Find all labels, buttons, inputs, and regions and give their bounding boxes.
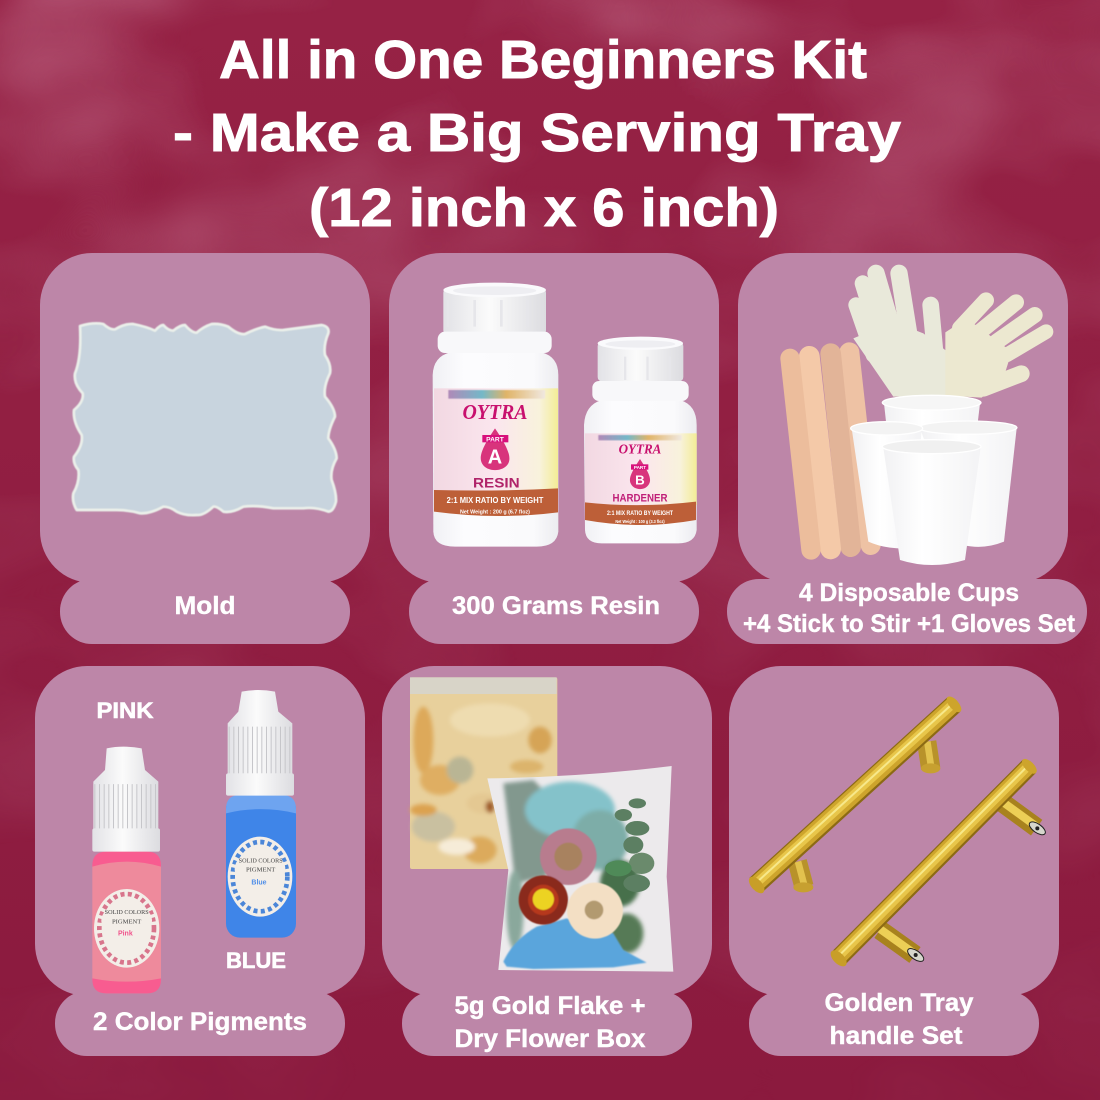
icon: blue pigment bottle: PIGMENT — [246, 867, 275, 874]
icon: blue pigment bottle: SOLID COLORS — [239, 857, 283, 864]
label: pink: PINK — [96, 698, 154, 723]
panel: resin — [389, 253, 719, 644]
icon: pink pigment bottle — [92, 747, 161, 993]
panel: gold flake and flowers — [382, 666, 712, 1056]
caption: gold flake and flowers — [454, 992, 646, 1053]
icon: gold flake bag — [410, 677, 557, 869]
icon: resin bottle: A — [488, 446, 502, 468]
icon: hardener bottle: B — [635, 472, 645, 487]
icon: pink pigment bottle: Pink — [118, 931, 133, 938]
icon: resin bottle: 2:1 MIX RATIO BY WEIGHT — [447, 496, 543, 505]
caption: gold flake and flowers: Dry Flower Box — [454, 1025, 646, 1053]
icon: pink pigment bottle: PIGMENT — [112, 918, 141, 925]
panel: mold — [40, 253, 370, 644]
icon: hardener bottle: Net Weight : 100 g (3.3 floz) — [615, 519, 665, 524]
icon: resin bottle: Net Weight : 200 g (6.7 floz) — [460, 510, 530, 516]
icon: gloves — [853, 273, 1046, 398]
icon: resin bottle: RESIN — [473, 475, 520, 491]
caption: cups sticks gloves — [743, 579, 1076, 638]
caption: handles: Golden Tray — [824, 989, 974, 1017]
label: blue: BLUE — [226, 948, 286, 973]
icon: hardener bottle: OYTRA — [619, 442, 661, 457]
title: (12 inch x 6 inch) — [309, 178, 779, 238]
background — [0, 0, 1100, 828]
icon: blue pigment bottle — [226, 690, 296, 938]
title: All in One Beginners Kit — [219, 30, 867, 90]
icon: golden handle one — [746, 694, 964, 896]
caption: resin: 300 Grams Resin — [452, 592, 660, 620]
caption: cups sticks gloves: 4 Disposable Cups — [799, 579, 1019, 607]
caption: handles — [824, 989, 974, 1050]
icon: blue pigment bottle: Blue — [251, 880, 267, 887]
caption: gold flake and flowers: 5g Gold Flake + — [454, 992, 646, 1020]
icon: mold tray — [73, 323, 337, 515]
icon: resin bottle — [433, 283, 558, 547]
icon: resin bottle: PART — [486, 436, 504, 443]
panel: pigments — [35, 666, 365, 1056]
icon: dried flower bag — [487, 766, 673, 972]
icon: hardener bottle: HARDENER — [612, 493, 668, 505]
caption: handles: handle Set — [830, 1022, 963, 1050]
caption: mold: Mold — [174, 592, 236, 620]
title — [173, 30, 901, 238]
icon: hardener bottle — [584, 337, 697, 543]
caption: cups sticks gloves: +4 Stick to Stir +1 Gloves Set — [743, 610, 1076, 638]
icon: paper cups — [851, 395, 1017, 565]
icon: wooden sticks — [790, 352, 871, 550]
icon: hardener bottle: PART — [634, 465, 646, 470]
icon: golden handle two — [828, 756, 1047, 969]
panel: cups sticks gloves — [727, 253, 1087, 644]
icon: pink pigment bottle: SOLID COLORS — [105, 909, 149, 916]
title: - Make a Big Serving Tray — [173, 103, 901, 163]
icon: hardener bottle: 2:1 MIX RATIO BY WEIGHT — [607, 510, 673, 517]
caption: pigments: 2 Color Pigments — [93, 1008, 307, 1036]
icon: resin bottle: OYTRA — [462, 402, 527, 424]
panel: handles — [729, 666, 1059, 1056]
